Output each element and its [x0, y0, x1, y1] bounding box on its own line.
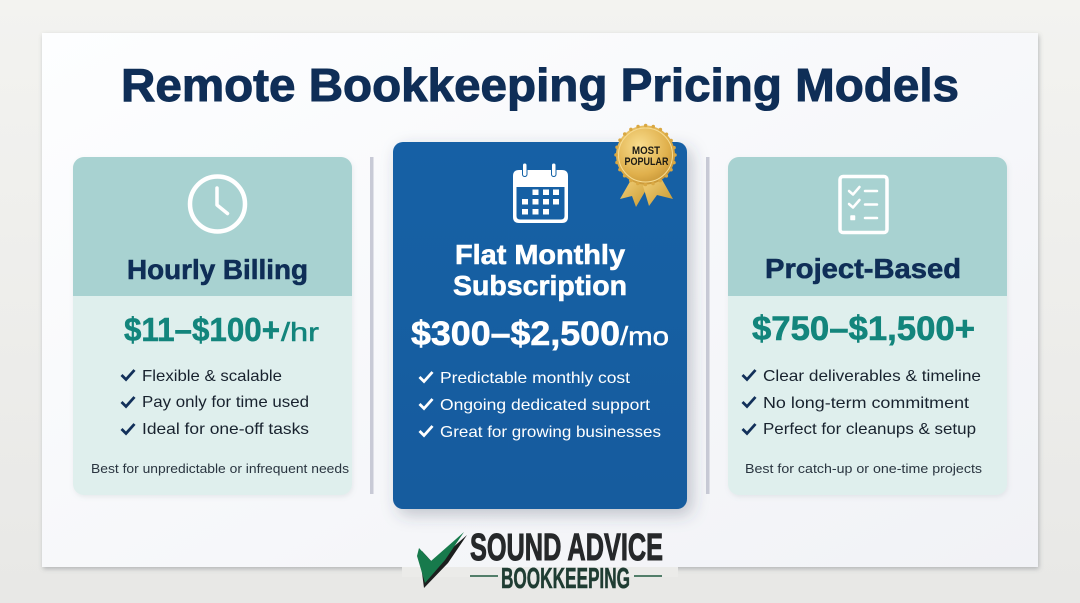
price: $300–$2,500	[411, 315, 620, 353]
feature list: Flexible & scalable	[142, 368, 282, 385]
heading: Subscription	[453, 270, 627, 301]
logo wordmark: SOUND ADVICE	[470, 527, 663, 569]
heading	[453, 239, 627, 301]
best for note: Best for unpredictable or infrequent needs	[91, 461, 350, 476]
feature list	[122, 368, 309, 438]
icon: checklist	[840, 176, 887, 232]
icon: calendar	[513, 163, 568, 223]
price: /mo	[620, 321, 669, 351]
panel: hourly billing	[73, 157, 352, 495]
icon: green check	[417, 532, 467, 588]
feature list: Clear deliverables & timeline	[763, 368, 981, 385]
heading: Hourly Billing	[127, 254, 308, 285]
feature list	[742, 368, 981, 438]
feature list	[420, 370, 661, 441]
price: /hr	[281, 317, 319, 347]
panel: project-based	[728, 157, 1007, 495]
feature list: Pay only for time used	[142, 394, 309, 411]
title: Remote Bookkeeping Pricing Models	[121, 59, 959, 111]
badge: most popular	[616, 126, 675, 207]
icon: clock	[190, 176, 245, 232]
badge: most popular: POPULAR	[624, 156, 669, 168]
feature list: Perfect for cleanups & setup	[763, 421, 976, 438]
panel: flat monthly subscription	[393, 126, 687, 509]
logo: sound advice bookkeeping	[402, 527, 678, 595]
heading: Project-Based	[765, 253, 961, 284]
card header	[728, 157, 1007, 296]
card header	[73, 157, 352, 296]
feature list: No long-term commitment	[763, 395, 970, 412]
logo subline: BOOKKEEPING	[501, 563, 630, 595]
price: $11–$100+	[124, 311, 280, 348]
feature list: Ongoing dedicated support	[440, 397, 651, 414]
heading: Flat Monthly	[455, 239, 625, 270]
feature list: Predictable monthly cost	[440, 370, 631, 387]
divider right	[706, 157, 710, 494]
feature list: Great for growing businesses	[440, 424, 661, 441]
badge: most popular: MOST	[632, 145, 660, 157]
feature list: Ideal for one-off tasks	[142, 421, 309, 438]
price: $750–$1,500+	[752, 310, 975, 348]
divider left	[370, 157, 374, 494]
best for note: Best for catch-up or one-time projects	[745, 461, 983, 476]
